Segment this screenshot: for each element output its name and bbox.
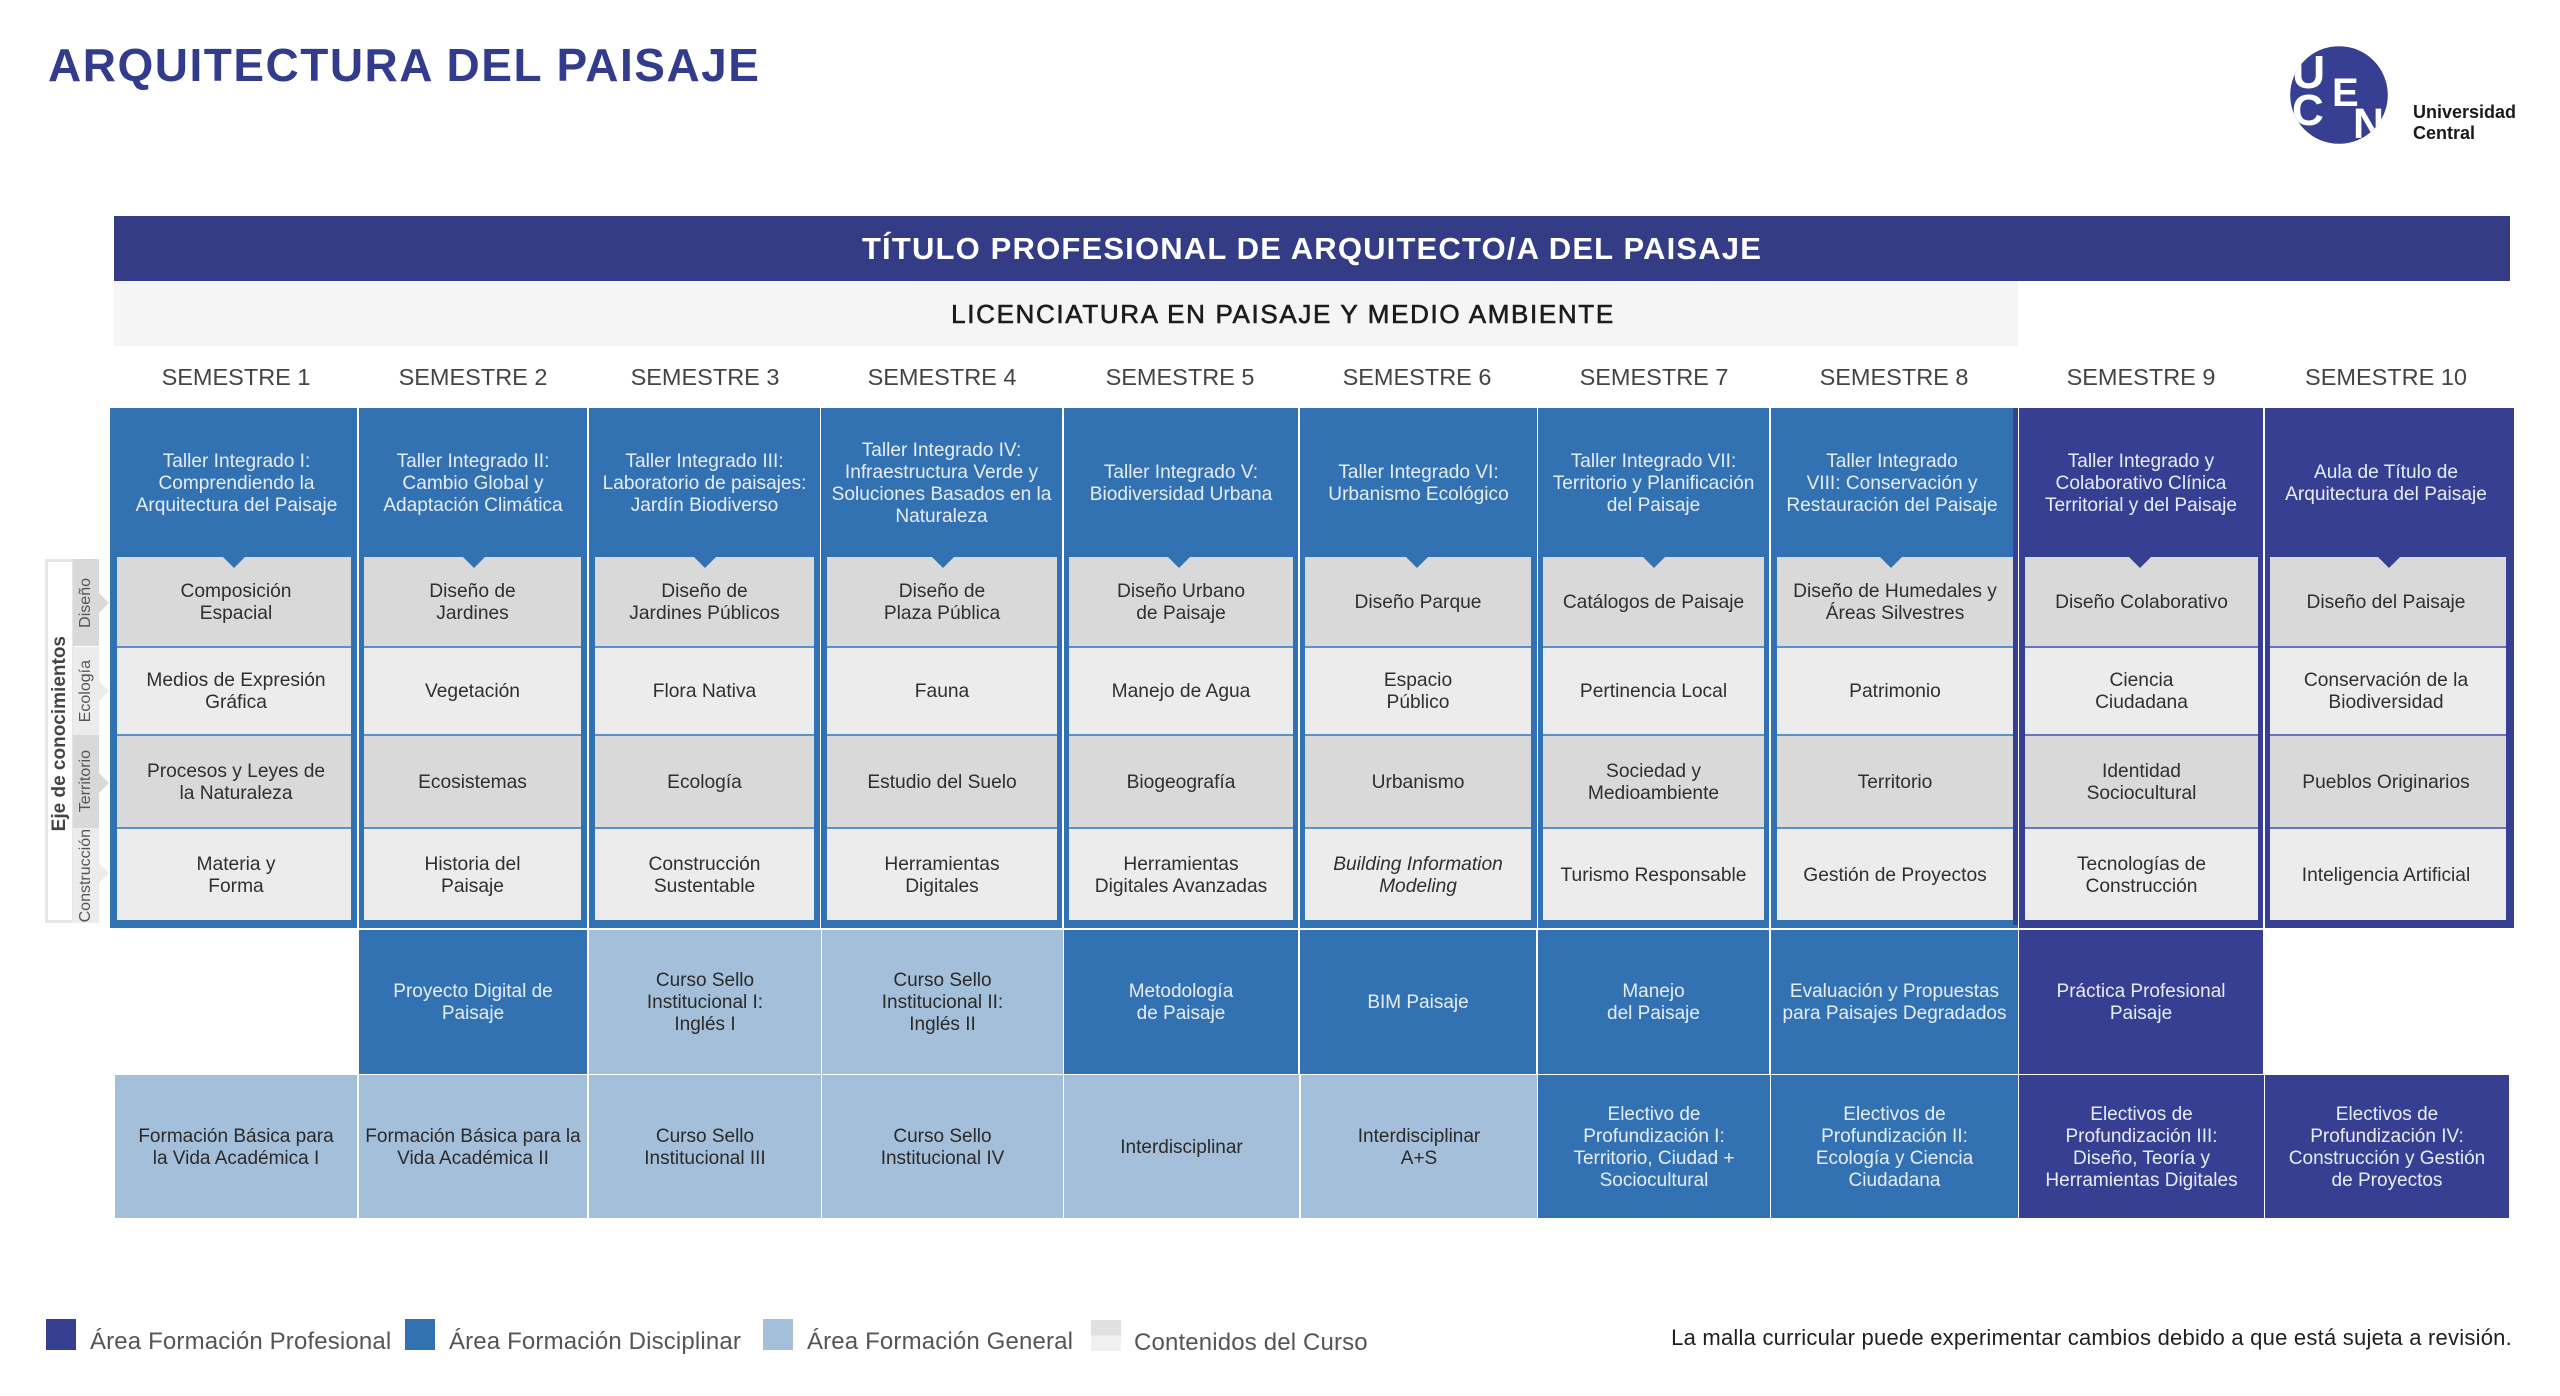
column: semester 4: Taller Integrado IV: [862, 440, 1021, 461]
course: para Paisajes Degradados [1783, 1003, 2006, 1024]
column: semester 5: Manejo de Agua [1112, 681, 1250, 702]
course [1301, 1075, 1537, 1218]
column: semester 7: del Paisaje [1607, 495, 1700, 516]
column: semester 5: Biogeografía [1127, 772, 1235, 792]
column: semester 1: Forma [208, 876, 264, 896]
legend [46, 1319, 1368, 1356]
column: semester 2: Ecosistemas [418, 772, 527, 792]
course row: second track [359, 930, 2263, 1074]
course [359, 1075, 587, 1218]
column: semester 7: Sociedad y [1606, 760, 1701, 782]
column: semester 1: Procesos y Leyes de [147, 760, 325, 782]
course: de Proyectos [2332, 1170, 2442, 1190]
column: semester 8: Áreas Silvestres [1826, 602, 1964, 624]
semester headers: SEMESTRE 6 [1343, 364, 1491, 390]
column: semester 6: Espacio [1384, 670, 1452, 691]
column: semester 10: Inteligencia Artificial [2302, 864, 2470, 886]
column: semester 6: Building Information [1333, 854, 1503, 874]
column: semester 6 [1300, 408, 1537, 928]
column: semester 1: Medios de Expresión [146, 670, 326, 691]
column: semester 2: Paisaje [441, 876, 504, 896]
banner: professional title [114, 216, 2510, 281]
logo: Universidad Central: Universidad [2413, 102, 2516, 122]
column: semester 8: Territorio [1858, 772, 1932, 792]
column: semester 10: Biodiversidad [2328, 692, 2444, 713]
column: semester 4: Plaza Pública [884, 602, 1000, 624]
column: semester 2: Cambio Global y [402, 473, 544, 494]
column: semester 5: Taller Integrado V: [1104, 462, 1258, 483]
column: semester 3: Sustentable [654, 876, 755, 896]
column: semester 4: Infraestructura Verde y [845, 462, 1038, 483]
course: Institucional I: [647, 992, 763, 1013]
column: semester 3 [589, 408, 820, 928]
semester headers [162, 364, 2467, 390]
course: Ciudadana [1849, 1170, 1940, 1190]
course: Inglés I [674, 1014, 736, 1035]
logo: Universidad Central: E [2332, 71, 2359, 115]
column: semester 2 [359, 408, 587, 928]
column: semester 7: Pertinencia Local [1580, 681, 1727, 702]
course: Manejo [1622, 981, 1685, 1002]
semester headers: SEMESTRE 1 [162, 364, 310, 390]
logo: Universidad Central [2290, 46, 2516, 144]
legend swatch: contenidos [1091, 1320, 1121, 1351]
axis: Territorio [73, 735, 99, 828]
column: semester 1 [110, 408, 357, 928]
column: semester 10: Pueblos Originarios [2302, 772, 2470, 792]
column: semester 9: Territorial y del Paisaje [2045, 495, 2237, 516]
column: semester 4: Soluciones Basados en la [832, 484, 1051, 505]
legend label: Área Formación Profesional [90, 1328, 391, 1355]
semester headers: SEMESTRE 8 [1820, 364, 1968, 390]
course: la Vida Académica I [153, 1148, 319, 1168]
semester headers: SEMESTRE 3 [631, 364, 779, 390]
course: Territorio, Ciudad + [1573, 1148, 1735, 1168]
logo: Universidad Central: N [2353, 100, 2384, 148]
banner: licentiate: LICENCIATURA EN PAISAJE Y MEDIO AMBIENTE [951, 299, 1615, 329]
logo: Universidad Central: U [2292, 46, 2325, 98]
column: semester 3: Construcción [648, 854, 760, 874]
course: A+S [1401, 1148, 1437, 1168]
course [822, 1075, 1063, 1218]
column: semester 9: Identidad [2102, 760, 2181, 782]
course: Institucional IV [881, 1148, 1004, 1168]
column: semester 8: VIII: Conservación y [1807, 473, 1977, 494]
column: semester 9: Ciudadana [2095, 692, 2188, 713]
course: Vida Académica II [397, 1148, 549, 1168]
column: semester 5: Herramientas [1123, 854, 1239, 874]
column: semester 3: Ecología [667, 772, 742, 792]
column: semester 2: Vegetación [425, 681, 520, 702]
column: semester 8: Restauración del Paisaje [1786, 495, 1998, 516]
column: semester 1: Taller Integrado I: [163, 451, 310, 472]
course: Construcción y Gestión [2289, 1148, 2485, 1168]
course [1538, 1075, 1770, 1218]
course: Curso Sello [656, 1126, 754, 1146]
course: Electivo de [1608, 1104, 1700, 1124]
course: Curso Sello [893, 1126, 992, 1146]
axis: Territorio: Territorio [77, 750, 94, 813]
axis: Diseño [73, 559, 99, 646]
legend swatch: profesional [46, 1319, 76, 1350]
column: semester 5 [1064, 408, 1298, 928]
logo: Universidad Central: C [2292, 86, 2324, 135]
banner: licentiate [114, 281, 2018, 346]
axis: Ecología: Ecología [77, 660, 94, 722]
course [1771, 1075, 2018, 1218]
column: semester 2: Adaptación Climática [383, 495, 563, 516]
column: semester 2: Historia del [424, 854, 520, 874]
course: Electivos de [2090, 1104, 2193, 1124]
course: Formación Básica para la [365, 1126, 581, 1146]
column: semester 9: Diseño Colaborativo [2055, 592, 2228, 612]
column: semester 4 [821, 408, 1062, 928]
axis: Ecología [73, 647, 99, 735]
column: semester 1: Materia y [197, 854, 275, 874]
semester headers: SEMESTRE 2 [399, 364, 547, 390]
column: semester 5: Digitales Avanzadas [1095, 876, 1267, 896]
column: semester 2: Jardines [436, 602, 509, 624]
column: semester 9: Tecnologías de [2077, 854, 2206, 874]
column: semester 3: Flora Nativa [653, 681, 756, 702]
axis frame label [45, 559, 74, 923]
axis: Construcción: Construcción [77, 829, 94, 922]
column: semester 6: Diseño Parque [1355, 592, 1481, 612]
column: semester 1: Composición [181, 580, 291, 602]
semester headers: SEMESTRE 5 [1106, 364, 1254, 390]
legend label: Área Formación General [807, 1328, 1073, 1355]
column: semester 8 [1771, 408, 2018, 928]
course [1064, 1075, 1299, 1218]
course: Diseño, Teoría y [2073, 1148, 2210, 1168]
course: Interdisciplinar [1358, 1126, 1480, 1146]
indigo strip between semester 8 and 9 [2013, 408, 2018, 925]
column: semester 9 [2019, 408, 2263, 928]
course [2265, 1075, 2509, 1218]
course: Electivos de [2336, 1104, 2438, 1124]
column: semester 5: Diseño Urbano [1117, 580, 1245, 602]
course [589, 1075, 821, 1218]
course: Metodología [1129, 981, 1233, 1002]
course [1771, 930, 2018, 1074]
column: semester 6: Urbanismo [1372, 772, 1464, 792]
panel: knowledge axis [45, 559, 109, 923]
column: semester 4: Herramientas [884, 854, 1000, 874]
course [1538, 930, 1769, 1074]
semester headers: SEMESTRE 9 [2067, 364, 2215, 390]
column: semester 7: Turismo Responsable [1561, 864, 1746, 886]
logo: Universidad Central: Central [2413, 123, 2475, 143]
column: semester 10: Arquitectura del Paisaje [2285, 484, 2487, 505]
course: Profundización I: [1583, 1126, 1725, 1146]
column: semester 7 [1538, 408, 1769, 928]
course: de Paisaje [1137, 1003, 1225, 1024]
course: Curso Sello [893, 970, 992, 991]
course: Interdisciplinar [1120, 1136, 1243, 1158]
course: del Paisaje [1607, 1003, 1700, 1024]
column: semester 2: Diseño de [429, 580, 516, 602]
axis: Diseño: Diseño [77, 578, 94, 627]
course: Paisaje [2110, 1003, 2172, 1024]
course: Práctica Profesional [2057, 981, 2225, 1002]
course row: third track [115, 1075, 2509, 1218]
column: semester 3: Taller Integrado III: [625, 451, 784, 472]
course: Paisaje [442, 1003, 504, 1024]
column: semester 1: Arquitectura del Paisaje [136, 495, 337, 516]
column: semester 6: Urbanismo Ecológico [1328, 484, 1509, 505]
column: semester 4: Fauna [915, 681, 969, 702]
course: Sociocultural [1600, 1170, 1708, 1190]
column: semester 8: Diseño de Humedales y [1793, 580, 1997, 602]
column: semester 8: Patrimonio [1849, 681, 1941, 702]
column: semester 3: Jardines Públicos [629, 602, 780, 624]
column: semester 7: Taller Integrado VII: [1571, 451, 1736, 472]
course: Electivos de [1843, 1104, 1946, 1124]
course: Curso Sello [656, 970, 754, 991]
column: semester 8: Taller Integrado [1826, 451, 1958, 472]
semester headers: SEMESTRE 7 [1580, 364, 1728, 390]
banner: professional title: TÍTULO PROFESIONAL DE ARQUITECTO/A DEL PAISAJE [862, 231, 1762, 266]
legend label: Contenidos del Curso [1134, 1329, 1368, 1356]
column: semester 9: Taller Integrado y [2068, 451, 2214, 472]
column: semester 9: Colaborativo Clínica [2056, 473, 2226, 494]
disclaimer note: La malla curricular puede experimentar cambios debido a que está sujeta a revisión. [1671, 1325, 2512, 1350]
column: semester 3: Laboratorio de paisajes: [603, 473, 806, 494]
course [589, 930, 821, 1074]
course: Profundización IV: [2310, 1126, 2464, 1146]
course: Inglés II [909, 1014, 976, 1035]
course: Herramientas Digitales [2045, 1170, 2238, 1190]
column: semester 6: Modeling [1379, 876, 1457, 896]
column: semester 1: Espacial [200, 602, 272, 624]
course [115, 1075, 357, 1218]
course [822, 930, 1063, 1074]
column: semester 4: Naturaleza [895, 506, 988, 527]
axis frame label: Eje de conocimientos [49, 636, 70, 832]
course: Institucional III [644, 1148, 766, 1168]
course: Profundización III: [2065, 1126, 2218, 1146]
legend swatch: general [763, 1319, 793, 1350]
column: semester 3: Diseño de [661, 580, 748, 602]
semester headers: SEMESTRE 4 [868, 364, 1016, 390]
course: Formación Básica para [138, 1126, 334, 1146]
course: Evaluación y Propuestas [1790, 981, 1999, 1002]
column: semester 7: Catálogos de Paisaje [1563, 592, 1744, 612]
course [1064, 930, 1298, 1074]
course [2019, 930, 2263, 1074]
column: semester 10: Aula de Título de [2314, 462, 2458, 483]
course [1300, 930, 1536, 1074]
column: semester 4: Digitales [905, 876, 979, 896]
course: Profundización II: [1821, 1126, 1968, 1146]
column: semester 5: Biodiversidad Urbana [1090, 484, 1272, 505]
column: semester 8: Gestión de Proyectos [1803, 864, 1987, 886]
column: semester 10 [2265, 408, 2514, 928]
column: semester 6: Público [1387, 692, 1449, 713]
column: semester 5: de Paisaje [1136, 602, 1226, 624]
column: semester 7: Medioambiente [1588, 782, 1719, 804]
column: semester 1: Comprendiendo la [158, 473, 315, 494]
column: semester 10: Diseño del Paisaje [2307, 592, 2465, 612]
column: semester 6: Taller Integrado VI: [1338, 462, 1499, 483]
course [2019, 1075, 2264, 1218]
column: semester 2: Taller Integrado II: [397, 451, 549, 472]
column: semester 1: la Naturaleza [179, 782, 293, 804]
column: semester 9: Ciencia [2109, 670, 2173, 691]
column: semester 10: Conservación de la [2304, 670, 2468, 691]
course: Institucional II: [882, 992, 1003, 1013]
semester headers: SEMESTRE 10 [2305, 364, 2467, 390]
course: Ecología y Ciencia [1816, 1148, 1973, 1168]
column: semester 9: Sociocultural [2087, 782, 2196, 804]
course [359, 930, 587, 1074]
column: semester 4: Diseño de [899, 580, 985, 602]
title: ARQUITECTURA DEL PAISAJE [48, 39, 760, 91]
axis: Construcción [73, 828, 99, 923]
course: Proyecto Digital de [393, 981, 553, 1002]
column: semester 9: Construcción [2086, 876, 2197, 896]
column: semester 1: Gráfica [205, 692, 267, 713]
column: semester 4: Estudio del Suelo [867, 772, 1017, 792]
column: semester 3: Jardín Biodiverso [631, 495, 778, 516]
column: semester 7: Territorio y Planificación [1553, 473, 1754, 494]
legend swatch: disciplinar [405, 1319, 435, 1350]
course: BIM Paisaje [1367, 992, 1469, 1013]
legend label: Área Formación Disciplinar [449, 1328, 741, 1355]
